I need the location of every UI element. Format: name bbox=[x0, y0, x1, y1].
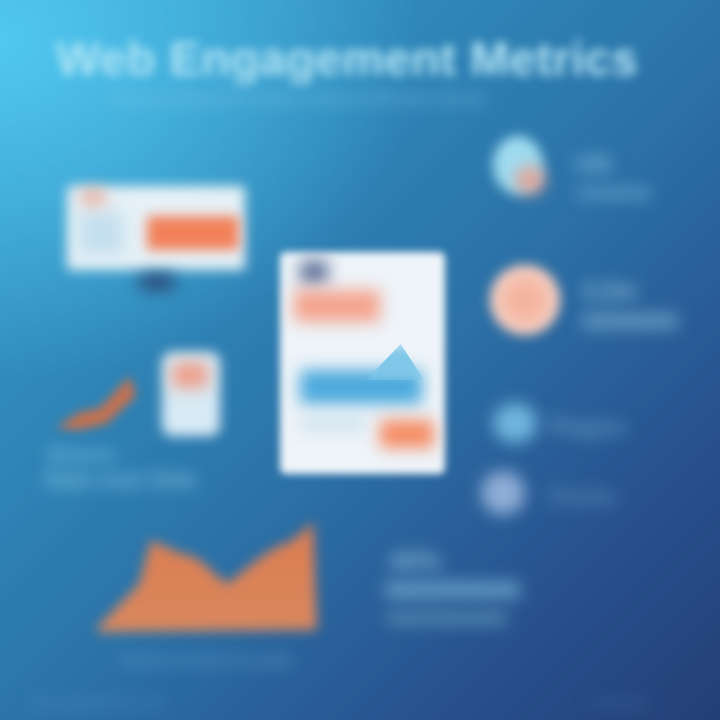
caption line one: Bounce bbox=[49, 445, 115, 465]
panel: monitor dashboard bbox=[58, 176, 254, 300]
caption: chart: Session duration by week bbox=[120, 652, 292, 668]
document sheet bbox=[280, 252, 445, 474]
orange bar block bbox=[147, 216, 239, 250]
stat line one bbox=[385, 581, 520, 599]
blue chart peak bbox=[366, 344, 424, 380]
metric: blue dot bbox=[485, 394, 626, 452]
arrow trend bbox=[54, 372, 142, 437]
area chart bbox=[90, 518, 326, 641]
metric: grey dot bbox=[472, 462, 616, 524]
monitor stand bbox=[139, 274, 175, 290]
icon: donut bbox=[490, 265, 560, 335]
metric: pie icon bbox=[485, 128, 653, 206]
icon: blue circle bbox=[493, 403, 537, 443]
metric caption bbox=[582, 313, 678, 329]
phone body bbox=[162, 352, 220, 436]
pie accent bbox=[515, 166, 545, 194]
screen light blue chart bbox=[79, 212, 123, 254]
orange value bbox=[380, 420, 434, 448]
monitor screen bbox=[67, 186, 245, 270]
stat line two bbox=[387, 611, 507, 625]
icon: lavender circle bbox=[481, 471, 525, 515]
salmon block bbox=[294, 290, 380, 322]
icon: pie bbox=[493, 136, 543, 194]
donut centre bbox=[502, 277, 548, 323]
light text line bbox=[300, 418, 366, 430]
caption: left text bbox=[41, 443, 199, 494]
panel: trend and phone bbox=[54, 342, 230, 446]
phone accent bbox=[172, 362, 208, 388]
metric caption bbox=[577, 188, 651, 198]
stat: chart side text bbox=[379, 544, 527, 632]
metric: donut bbox=[480, 256, 684, 344]
panel: report document bbox=[274, 246, 452, 480]
header accent bbox=[81, 190, 105, 204]
blue chart band bbox=[300, 370, 422, 404]
document avatar bbox=[300, 260, 328, 284]
